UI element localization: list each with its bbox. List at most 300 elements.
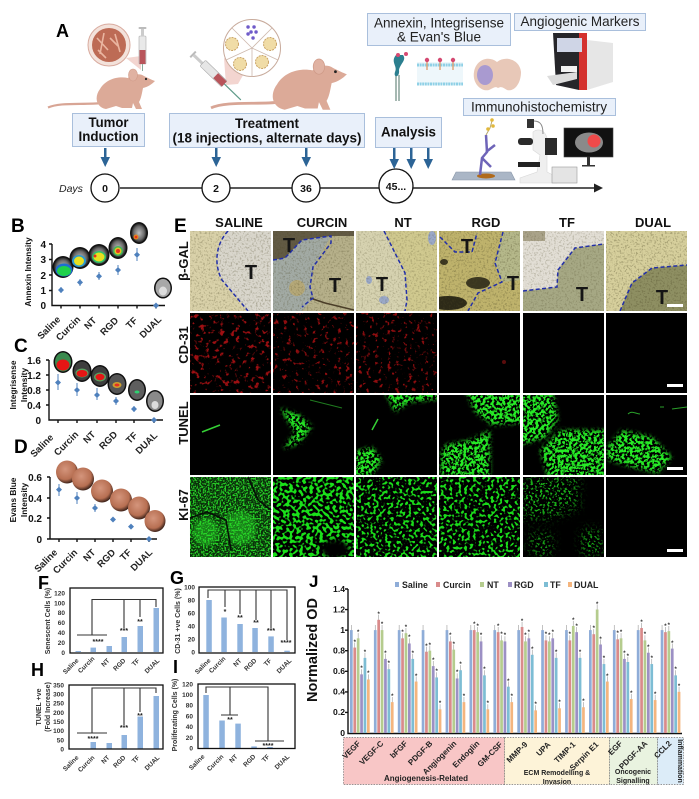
y axis title: Annexin Intensity — [23, 237, 33, 307]
x labels: Curcin — [77, 754, 96, 774]
bars group EGF — [613, 625, 633, 733]
group label ECM remodelling: ECM Remodelling & — [524, 770, 590, 777]
y axis title: (Fold Increase) — [45, 682, 52, 732]
bars group TIMP-1 — [565, 618, 585, 733]
timeline marker day 36 — [292, 174, 320, 202]
panel letter B: B — [11, 216, 25, 237]
bars — [203, 695, 273, 748]
group label oncogenic signalling — [615, 769, 651, 785]
y tick labels: 1.4 — [333, 584, 345, 594]
legend: Saline — [402, 580, 428, 590]
bars group TIMP-1: ***** — [569, 618, 585, 705]
y tick labels: 0 — [60, 746, 64, 754]
panel D: Evans blue intensity chart — [8, 437, 166, 576]
timeline marker day 36: 36 — [300, 183, 312, 195]
timeline marker day 45: 45... — [386, 181, 406, 193]
β-GAL row images: T — [656, 287, 668, 309]
x labels: RGD — [112, 657, 128, 673]
category labels: VEGF — [341, 739, 362, 761]
column headers: CURCIN — [297, 215, 347, 230]
legend — [395, 580, 599, 590]
category labels — [341, 739, 674, 777]
panel C: integrisense intensity chart — [8, 336, 164, 460]
β-GAL row images: T — [329, 275, 341, 297]
y axis title: Integrisense — [8, 360, 18, 409]
y tick labels: 1 — [40, 286, 46, 297]
y axis title — [8, 360, 29, 409]
bars group CCL2: ***** — [664, 623, 681, 690]
y tick labels: 0.4 — [28, 494, 42, 505]
y tick labels: 4 — [40, 240, 46, 251]
significance brackets: **** — [93, 639, 104, 646]
icon: monitor with brain scan — [564, 128, 613, 166]
y tick labels: 40 — [58, 630, 65, 637]
x labels: RGD — [95, 547, 118, 570]
y tick labels: 350 — [53, 682, 64, 690]
y tick labels: 0.8 — [333, 646, 345, 656]
category labels: CCL2 — [652, 739, 674, 760]
bars group Serpin E1 — [589, 602, 609, 733]
y axis title: Evans Blue — [8, 477, 18, 522]
β-GAL row images: T — [461, 236, 473, 258]
plot frame — [199, 587, 295, 653]
significance brackets: * — [224, 609, 227, 616]
y tick labels — [54, 590, 65, 657]
y tick labels — [27, 356, 41, 427]
y tick labels: 20 — [58, 640, 65, 647]
bars group Endoglin — [470, 622, 490, 733]
x labels: DUAL — [276, 657, 293, 675]
category labels: EGF — [606, 739, 624, 757]
legend: TF — [550, 580, 561, 590]
β-GAL row images: T — [283, 235, 295, 257]
x labels: Saline — [33, 547, 60, 575]
β-GAL row images: T — [507, 273, 519, 295]
y tick labels: 40 — [188, 624, 195, 630]
y tick labels: 0 — [189, 746, 193, 752]
label: days: Days — [59, 183, 84, 195]
KI-67 row images — [190, 477, 687, 558]
timeline arrowhead — [594, 184, 603, 192]
data points — [55, 374, 157, 423]
x labels: TF — [124, 430, 140, 446]
y tick labels — [53, 682, 64, 754]
y tick labels — [184, 584, 195, 656]
icon: large mouse — [211, 59, 347, 110]
y tick labels: 0.4 — [27, 401, 41, 412]
label: tumor induction — [72, 114, 144, 146]
legend: DUAL — [574, 580, 599, 590]
y tick labels: 120 — [182, 682, 193, 688]
β-GAL row images: T — [576, 284, 588, 306]
x labels — [29, 429, 160, 460]
data points — [58, 248, 159, 308]
x labels: NT — [100, 657, 111, 669]
group label inflammation: Inflammation — [676, 739, 683, 783]
bars group bFGF — [398, 625, 418, 733]
x labels: RGD — [97, 429, 120, 452]
row labels — [176, 241, 191, 521]
x labels — [62, 754, 161, 774]
x labels — [62, 655, 161, 676]
y tick labels: 0 — [36, 535, 42, 546]
y tick labels: 60 — [186, 714, 193, 720]
label: annexin, integrisense and Evan's blue: & Evan's Blue — [397, 28, 481, 44]
icon: microscope — [518, 119, 577, 183]
y axis title — [8, 477, 29, 522]
y axis title: Proliferating Cells (%) — [172, 679, 179, 751]
category labels: VEGF-C — [358, 739, 386, 767]
arrow: treatment to day 2 — [212, 148, 221, 167]
y tick labels: 0 — [340, 728, 345, 738]
icon: integrin receptor — [394, 52, 408, 101]
x labels: TF — [118, 547, 134, 563]
label: immunohistochemistry: Immunohistochemistry — [471, 98, 607, 114]
β-GAL row images: T — [376, 274, 388, 296]
icon: tumor tissue inset — [88, 24, 141, 70]
y tick labels: 300 — [53, 692, 64, 698]
y tick labels: 0.4 — [333, 686, 345, 696]
y axis title: Senescent Cells (%) — [45, 588, 52, 654]
y tick labels: 0.8 — [27, 386, 41, 397]
bars group PDGF-AA — [637, 620, 657, 733]
x labels: DUAL — [274, 753, 291, 771]
bars group MMP-9 — [517, 619, 537, 733]
y tick labels: 0.6 — [28, 473, 42, 484]
bars group Angiogenin — [446, 625, 466, 733]
y tick labels: 40 — [186, 724, 193, 731]
plot frame — [70, 588, 163, 653]
bars group UPA: ***** — [545, 630, 561, 706]
y tick labels: 0 — [61, 650, 65, 657]
x labels: TF — [261, 753, 271, 764]
category labels: PDGF-AA — [617, 739, 650, 771]
β-GAL row images — [190, 231, 687, 311]
panel A: experimental timeline — [48, 13, 646, 203]
icon: antibody on slide — [452, 118, 515, 180]
group label oncogenic signalling: Oncogenic — [615, 769, 651, 776]
bars group PDGF-AA: ***** — [640, 620, 657, 698]
bars group VEGF: ***** — [354, 630, 370, 677]
bars — [76, 608, 159, 652]
icon: analyzer instrument — [547, 33, 613, 90]
icon: small mouse — [48, 69, 155, 109]
x labels: RGD — [242, 753, 258, 769]
significance brackets: ** — [137, 713, 143, 720]
timeline axis — [120, 187, 596, 189]
x labels: Curcin — [54, 314, 83, 343]
bars — [90, 696, 159, 749]
icon: syringe at the head — [138, 27, 146, 71]
y tick labels: 0 — [40, 301, 46, 312]
significance brackets: ** — [253, 620, 259, 627]
x labels: NT — [100, 754, 111, 766]
label: treatment: (18 injections, alternate days) — [172, 130, 362, 146]
panel letter A: A — [56, 21, 69, 41]
y tick labels: 3 — [40, 255, 46, 266]
arrow: treatment to day 36 — [302, 148, 311, 167]
plot frame — [198, 684, 295, 748]
y tick labels: 1.2 — [27, 371, 41, 382]
y tick labels: 120 — [54, 590, 65, 598]
panel letter C: C — [14, 336, 28, 357]
significance brackets: **** — [281, 640, 292, 647]
x labels: Saline — [29, 432, 56, 460]
panel G: CD-31 positive cells bar chart — [170, 568, 295, 676]
x labels: NT — [82, 315, 99, 332]
y tick labels: 60 — [188, 610, 195, 618]
bars group PDGF-B: ***** — [425, 643, 442, 707]
x labels: DUAL — [144, 657, 161, 675]
panel F: senescent cells bar chart — [38, 573, 163, 676]
significance brackets — [206, 687, 284, 750]
x labels — [194, 655, 293, 676]
y axis title: Intensity — [19, 368, 29, 402]
category labels: PDGF-B — [406, 739, 435, 767]
x labels: Curcin — [52, 429, 81, 458]
x labels: Saline — [194, 657, 213, 676]
panel letter E: E — [174, 216, 187, 237]
x labels: RGD — [98, 315, 121, 338]
y tick labels: 0.6 — [333, 666, 345, 676]
x labels: Curcin — [206, 753, 225, 773]
bars group VEGF — [350, 625, 370, 733]
arrows: analysis to day 45 — [390, 148, 433, 169]
icon: treatment syringe — [190, 50, 244, 103]
y tick labels: 1.6 — [27, 356, 41, 367]
bars group GM-CSF: ***** — [497, 624, 514, 700]
x labels — [188, 753, 291, 773]
bars group Serpin E1: ***** — [593, 602, 609, 680]
legend: RGD — [514, 580, 534, 590]
timeline marker day 0: 0 — [102, 183, 108, 195]
row labels: CD-31 — [176, 326, 191, 364]
y tick labels: 80 — [186, 702, 193, 710]
x labels — [33, 547, 155, 576]
y tick labels: 50 — [57, 738, 64, 744]
significance brackets — [77, 600, 156, 646]
y axis title: Normalized OD — [305, 598, 321, 702]
x labels: Saline — [62, 754, 81, 773]
axes — [46, 360, 163, 423]
y tick labels: 150 — [53, 719, 64, 726]
y tick labels: 2 — [40, 271, 46, 282]
y tick labels: 1 — [340, 625, 345, 635]
brain photographs — [56, 460, 166, 532]
y tick labels: 0 — [35, 416, 41, 427]
significance brackets — [208, 590, 292, 647]
bars group GM-CSF — [493, 624, 514, 733]
panel letter H: H — [31, 660, 44, 680]
significance brackets: ** — [227, 717, 233, 724]
timeline marker day 2 — [202, 174, 230, 202]
y tick labels: 200 — [53, 710, 64, 717]
label: treatment: Treatment — [235, 115, 299, 131]
x labels: DUAL — [144, 754, 161, 772]
group label angiogenesis: Angiogenesis-Related — [384, 774, 468, 783]
timeline marker day 0 — [91, 174, 119, 202]
significance brackets: *** — [267, 628, 275, 635]
label: tumor induction: Induction — [78, 128, 138, 144]
panel letter I: I — [173, 657, 178, 677]
y axis title: TUNEL +ve — [36, 688, 43, 726]
y tick labels — [28, 473, 42, 546]
panel I: proliferating cells bar chart — [172, 657, 295, 773]
legend: Curcin — [443, 580, 471, 590]
y tick labels — [40, 240, 46, 312]
group label oncogenic signalling: Signalling — [616, 778, 650, 785]
y tick labels: 80 — [188, 598, 195, 604]
bars group EGF: ***** — [616, 630, 633, 697]
x labels: Curcin — [77, 655, 96, 675]
bars group PDGF-B — [422, 625, 442, 733]
y axis title: Intensity — [19, 483, 29, 517]
category labels: Endoglin — [451, 739, 481, 770]
y tick labels: 100 — [54, 600, 65, 608]
panel E: histology image grid — [174, 215, 687, 558]
label: treatment — [170, 114, 364, 148]
group label ECM remodelling: Invasion — [543, 779, 571, 786]
icon: cell membrane — [417, 58, 463, 84]
y tick labels: 0.2 — [333, 707, 345, 717]
y tick labels: 20 — [188, 636, 195, 644]
column headers: TF — [559, 215, 575, 230]
significance brackets — [77, 688, 156, 743]
y axis title — [36, 682, 52, 732]
category labels: GM-CSF — [476, 740, 504, 769]
label: angiogenic markers: Angiogenic Markers — [520, 13, 640, 29]
column headers: DUAL — [635, 215, 671, 230]
legend: NT — [487, 580, 499, 590]
y tick labels: 60 — [58, 620, 65, 627]
axes — [49, 244, 165, 308]
icon: brain section with tumor — [474, 59, 521, 90]
y tick labels — [182, 682, 193, 752]
column headers: SALINE — [215, 215, 263, 230]
significance brackets: *** — [120, 725, 128, 732]
label: annexin, integrisense and Evan's blue: Annexin, Integrisense — [374, 14, 504, 30]
category labels: Angiogenin — [421, 739, 458, 777]
x labels: NT — [81, 429, 98, 446]
x labels: Saline — [36, 314, 63, 342]
panel letter F: F — [38, 573, 49, 593]
x labels: TF — [263, 657, 273, 668]
x labels: Saline — [188, 753, 207, 772]
bars group UPA — [541, 625, 561, 733]
y tick labels: 100 — [182, 692, 193, 699]
bars group CCL2 — [661, 623, 681, 733]
category labels: Serpin E1 — [568, 740, 601, 773]
x labels: Curcin — [51, 547, 80, 576]
category labels: TIMP-1 — [552, 740, 578, 765]
icon: treatment inset pie — [224, 20, 280, 85]
timeline marker day 2: 2 — [213, 183, 219, 195]
x labels: DUAL — [138, 314, 164, 341]
x labels: NT — [81, 547, 98, 564]
panel letter J: J — [309, 572, 318, 591]
significance brackets: ** — [137, 619, 143, 626]
bars group VEGF-C — [374, 612, 394, 733]
panel B: annexin intensity chart — [11, 216, 172, 343]
column headers: RGD — [472, 215, 500, 230]
x labels: DUAL — [129, 547, 155, 574]
bars group Endoglin: ***** — [473, 622, 490, 707]
x labels: RGD — [243, 657, 259, 673]
x labels: NT — [228, 753, 239, 765]
x labels: TF — [131, 754, 141, 765]
y tick labels: 1.2 — [333, 604, 345, 614]
significance brackets: *** — [120, 628, 128, 635]
bars group bFGF: ***** — [401, 625, 418, 680]
panel letter G: G — [170, 568, 184, 588]
x labels: DUAL — [134, 430, 160, 457]
label: annexin, integrisense and Evan's blue — [368, 14, 510, 46]
label: analysis: Analysis — [381, 124, 436, 140]
y tick labels: 80 — [58, 610, 65, 617]
plot frame — [69, 685, 163, 749]
x labels: Saline — [62, 657, 81, 676]
category labels: MMP-9 — [505, 740, 530, 765]
y axis — [345, 589, 682, 734]
bars group VEGF-C: ***** — [377, 612, 394, 700]
column headers — [215, 215, 671, 230]
significance brackets: **** — [263, 743, 274, 750]
y tick labels: 0.2 — [28, 514, 42, 525]
CD-31 row images — [190, 313, 687, 393]
group label ECM remodelling — [524, 770, 590, 786]
column headers: NT — [394, 215, 412, 230]
label: analysis — [376, 118, 442, 148]
y tick labels: 250 — [53, 700, 64, 708]
category labels: UPA — [535, 740, 553, 758]
panel J: normalized OD grouped bar chart — [305, 572, 684, 786]
category background bands — [344, 738, 684, 784]
y tick labels: 20 — [186, 735, 193, 742]
y tick labels: 100 — [184, 584, 195, 592]
y tick labels: 100 — [53, 728, 64, 735]
x labels: NT — [232, 657, 243, 669]
y axis title: CD-31 +ve Cells (%) — [175, 588, 182, 654]
y tick labels — [333, 584, 345, 738]
bars group MMP-9: ***** — [521, 619, 537, 708]
row labels: KI-67 — [176, 489, 191, 521]
imaging thumbnails — [54, 351, 164, 412]
panel H: TUNEL positive bar chart — [31, 660, 163, 774]
row labels: β-GAL — [176, 241, 191, 281]
axes — [47, 477, 157, 542]
arrow: tumor induction to day 0 — [100, 148, 110, 167]
category labels: bFGF — [388, 739, 409, 760]
data points — [56, 484, 152, 542]
label: tumor induction: Tumor — [88, 114, 129, 130]
TUNEL row images — [190, 395, 687, 475]
row labels: TUNEL — [176, 401, 191, 445]
β-GAL row images: T — [245, 262, 257, 284]
bars group Angiogenin: ***** — [449, 633, 466, 700]
x labels: RGD — [112, 754, 128, 770]
y tick labels: 0 — [191, 650, 195, 656]
x labels: TF — [124, 315, 140, 331]
imaging thumbnails — [52, 222, 172, 298]
significance brackets: ** — [237, 615, 243, 622]
x labels — [36, 314, 164, 343]
bars — [206, 600, 290, 652]
timeline marker day 45 — [379, 169, 413, 203]
x labels: TF — [131, 657, 141, 668]
significance brackets: **** — [88, 736, 99, 743]
panel letter D: D — [14, 437, 28, 458]
x labels: Curcin — [208, 655, 227, 675]
